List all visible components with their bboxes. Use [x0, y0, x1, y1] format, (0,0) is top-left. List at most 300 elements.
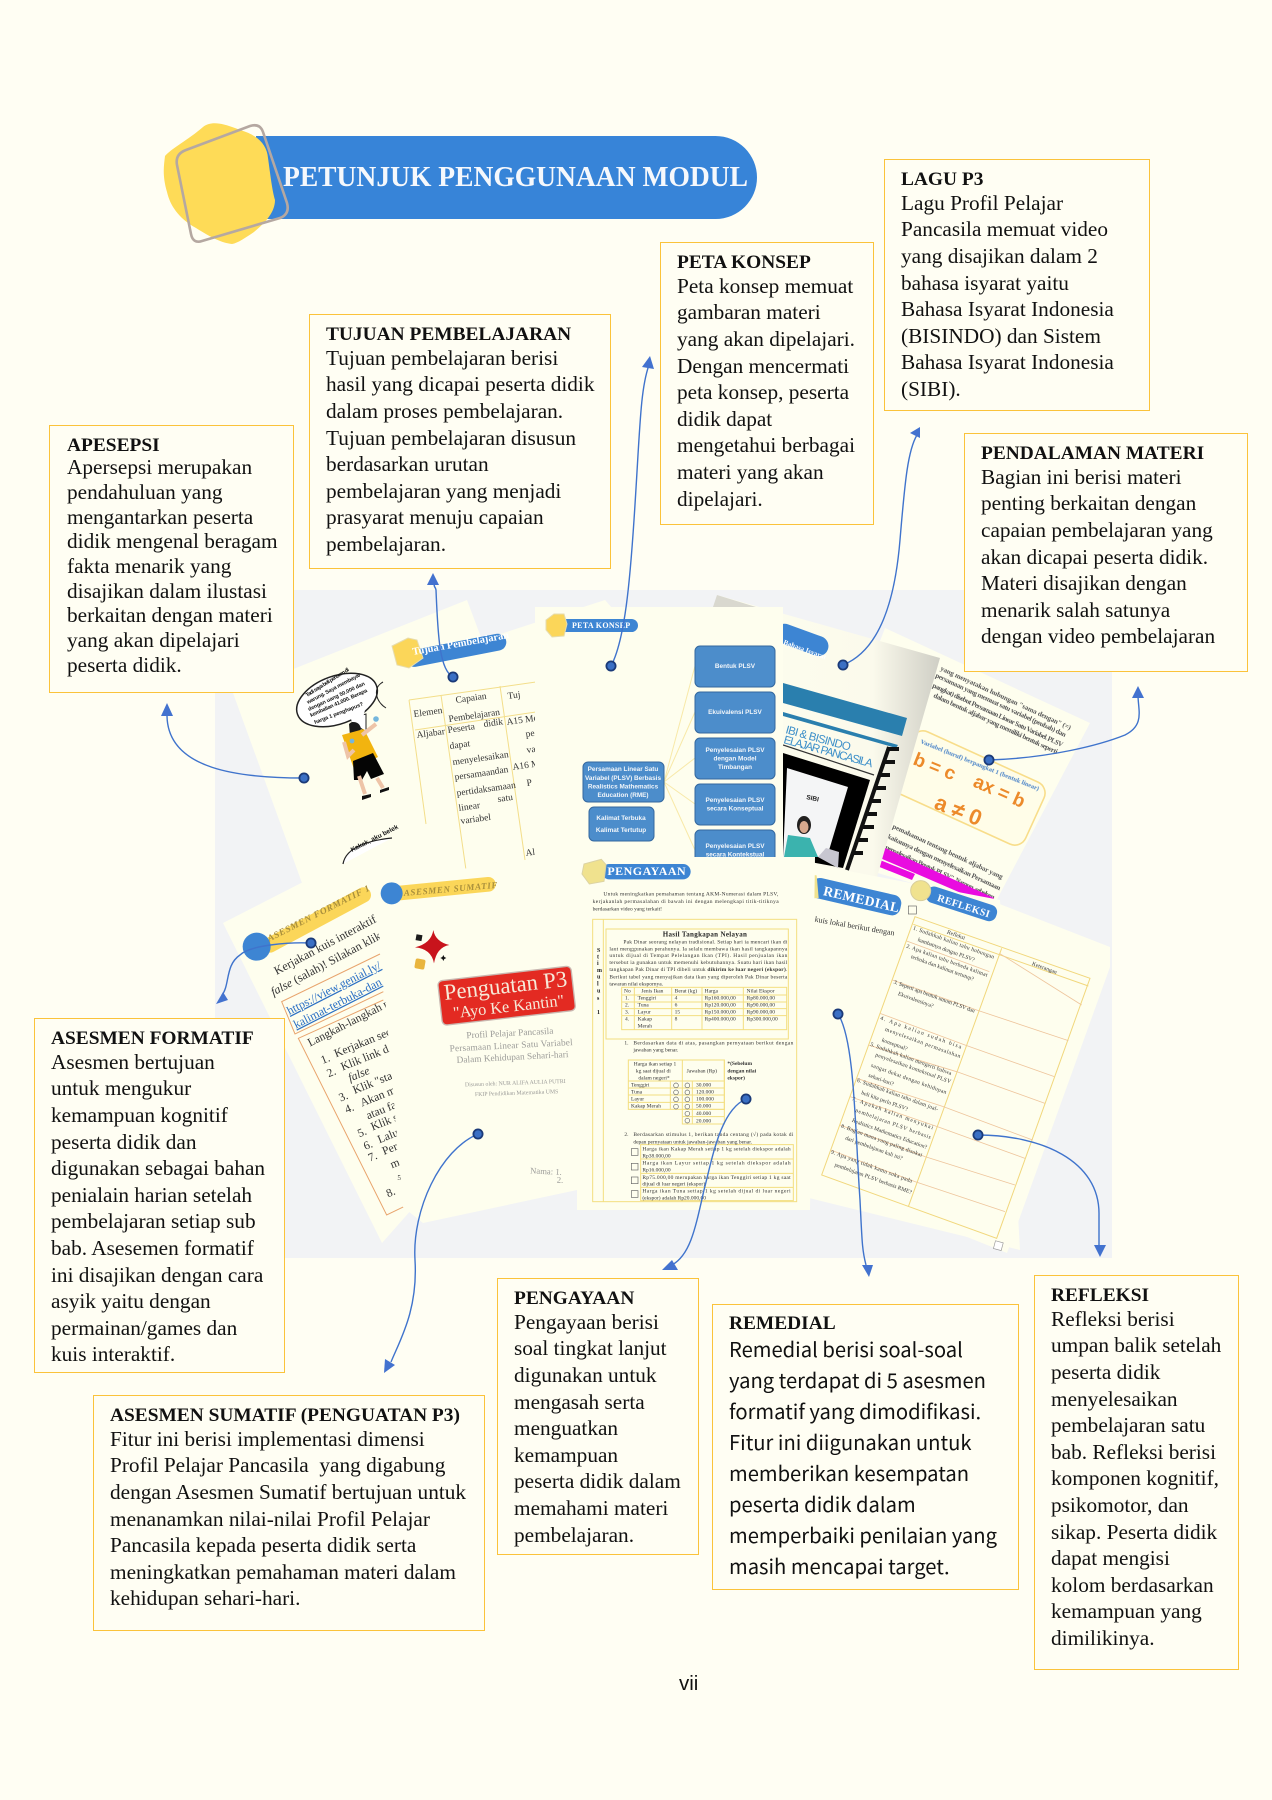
page: pendalaman materi: kaitannya dengan menyelesaikan Persamaan: [886, 833, 1002, 892]
panel: lagu p3: [884, 159, 1150, 411]
tujuan pembelajaran table: A16 M: [512, 759, 541, 773]
page: pengayaan: Rp16.000,00: [642, 1167, 671, 1173]
panel: apesepsi: [49, 425, 294, 693]
panel: pengayaan: pembelajaran.: [514, 1523, 634, 1547]
page: pengayaan: Harga ikan Kakap Merah setiap 1 kg setelah diekspor adalah: [642, 1147, 791, 1153]
panel: asesmen sumatif: Pancasila kepada peserta didik serta: [110, 1533, 416, 1557]
page: asesmen sumatif: Profil Pelajar Pancasila: [466, 1026, 554, 1041]
panel: apesepsi: berkaitan dengan materi: [67, 603, 273, 627]
panel: asesmen formatif: kemampuan kognitif: [51, 1103, 228, 1127]
panel: apesepsi: mengantarkan peserta: [67, 505, 253, 529]
panel: apesepsi: yang akan dipelajari: [67, 628, 240, 652]
page: asesmen formatif: Kerjakan sec: [332, 1025, 393, 1060]
page: pengayaan: Rp75.000,00 merupakan harga ikan Tenggiri setiap 1 kg saat: [642, 1175, 791, 1181]
page: refleksi: hambatnya dengan PLSV?: [917, 937, 976, 964]
panel: pengayaan: Pengayaan berisi: [514, 1310, 659, 1334]
panel: lagu p3: yang disajikan dalam 2: [901, 244, 1098, 268]
page: peta konsep: secara Kontekstual: [706, 852, 765, 858]
page: refleksi: Keterangan: [1031, 961, 1058, 976]
page: pengayaan: 4.: [625, 1017, 630, 1023]
page: asesmen formatif: Kerjakan kuis interaktif: [272, 912, 379, 978]
page: pengayaan: 1.: [625, 996, 630, 1002]
panel: refleksi: sikap. Peserta didik: [1051, 1520, 1217, 1544]
tujuan pembelajaran header: [392, 630, 510, 668]
page: pengayaan: dijual di luar negeri (ekspor): [642, 1181, 705, 1188]
page: refleksi: [822, 881, 1110, 1253]
page: pengayaan: 2.: [624, 1132, 629, 1138]
page: peta konsep: secara Konseptual: [707, 806, 764, 812]
panel: lagu p3: (BISINDO) dan Sistem: [901, 324, 1101, 348]
page: refleksi: sangat dekat dengan kehidupan: [870, 1063, 947, 1096]
panel: asesmen formatif: ASESMEN FORMATIF: [51, 1028, 254, 1049]
page: peta konsep: PETA KONSEP: [572, 621, 630, 630]
page: pengayaan: 1: [597, 1010, 600, 1016]
page: pengayaan: Pak Dinar seorang nelayan tradisional. Setiap hari ia mencari ikan di: [623, 939, 788, 945]
page: pengayaan: S: [597, 948, 601, 954]
panel: asesmen sumatif: [93, 1395, 485, 1631]
page: asesmen formatif: kalimat-terbuka-dan: [291, 975, 384, 1031]
tujuan pembelajaran table: A15 Me: [506, 714, 539, 728]
page: refleksi: pembelajaran PLSV berbasis: [854, 1108, 932, 1141]
page: asesmen formatif: atau fa: [364, 1098, 399, 1122]
panel: refleksi: REFLEKSI: [1051, 1285, 1149, 1306]
panel: tujuan pembelajaran: prasyarat menuju capaian: [326, 505, 544, 529]
panel: refleksi: peserta didik: [1051, 1360, 1160, 1384]
page: pendalaman materi: yang menyatakan hubungan "sama dengan" (=): [939, 665, 1073, 732]
page: pendalaman materi: Variabel (huruf) berpangkat 1 (bentuk linear): [919, 738, 1040, 793]
page: asesmen formatif: 8.: [384, 1185, 397, 1200]
page: peta konsep: Penyelesaian PLSV: [706, 843, 765, 850]
panel: refleksi: komponen kognitif,: [1051, 1466, 1219, 1490]
page: asesmen formatif: 5.: [356, 1125, 369, 1140]
page: asesmen formatif: false (salah)! Silakan klik: [268, 929, 383, 999]
page: pengayaan: Hasil Tangkapan Nelayan: [663, 931, 747, 939]
panel: pengayaan: [497, 1278, 699, 1555]
page: asesmen formatif: 4.: [343, 1101, 356, 1116]
panel: pengayaan: peserta didik dalam: [514, 1469, 681, 1493]
tujuan pembelajaran table: Capaian: [455, 692, 487, 706]
tujuan pembelajaran table: P: [526, 778, 533, 789]
panel: pendalaman materi: capaian pembelajaran yang: [981, 518, 1213, 542]
page: refleksi: 8. Bagian mana yang paling disukai: [840, 1124, 923, 1159]
panel: asesmen sumatif: meningkatkan pemahaman materi dalam: [110, 1560, 456, 1584]
panel: apesepsi: APESEPSI: [67, 435, 160, 456]
page: asesmen formatif: false: [346, 1064, 372, 1084]
tujuan pembelajaran table: pe: [525, 729, 535, 740]
page: pengayaan: Tuna: [631, 1090, 643, 1096]
panel: pengayaan: memahami materi: [514, 1496, 668, 1520]
page: refleksi: 7. Apakah kalian menyukai: [851, 1096, 934, 1131]
tujuan pembelajaran table: [409, 682, 541, 870]
panel: refleksi: menyelesaikan: [1051, 1387, 1178, 1411]
panel: refleksi: kemampuan yang: [1051, 1599, 1202, 1623]
page: pengayaan: Layur: [638, 1010, 651, 1016]
page: pengayaan: u: [597, 975, 601, 981]
page: peta konsep: Persamaan Linear Satu: [588, 766, 658, 773]
panel: tujuan pembelajaran: Tujuan pembelajaran disusun: [326, 426, 576, 450]
page: asesmen sumatif: Persamaan Linear Satu Variabel: [449, 1038, 573, 1055]
panel: pengayaan: soal tingkat lanjut: [514, 1336, 667, 1360]
tujuan pembelajaran table: menyelesaikan: [452, 750, 510, 768]
page: asesmen formatif: [223, 860, 420, 1243]
page: asesmen formatif: ASESMEN FORMATIF 1: [265, 884, 372, 945]
tujuan pembelajaran table: Peserta: [447, 722, 476, 736]
page: pengayaan: 30.000: [696, 1083, 711, 1089]
page: pengayaan: Kakap: [638, 1017, 652, 1023]
tujuan pembelajaran table: va: [526, 745, 537, 756]
panel: remedial: Fitur ini diigunakan untuk: [729, 1426, 972, 1456]
panel: refleksi: pembelajaran satu: [1051, 1413, 1205, 1437]
tujuan pembelajaran table: dan: [494, 765, 509, 777]
panel: pengayaan: menguatkan: [514, 1416, 618, 1440]
page: peta konsep: Ekuivalensi PLSV: [708, 709, 763, 716]
page: pengayaan: Berikut tabel yang menyajikan data ikan yang diperoleh Pak Dinar beserta: [609, 974, 788, 980]
page: pengayaan: PENGAYAAN: [607, 864, 686, 878]
page: pengayaan: i: [597, 961, 599, 967]
panel: remedial: [712, 1304, 1019, 1590]
page: pengayaan: tangkapan Pak Dinar di TPI dibeli untuk dikirim ke luar negeri (ekspor).: [609, 966, 788, 973]
panel: remedial: masih mencapai target.: [729, 1550, 950, 1580]
panel: tujuan pembelajaran: berdasarkan urutan: [326, 452, 489, 476]
page: pendalaman materi: [800, 628, 1090, 907]
tujuan pembelajaran table: satu: [497, 793, 514, 805]
panel: lagu p3: Lagu Profil Pelajar: [901, 191, 1063, 215]
panel: asesmen formatif: bab. Asesemen formatif: [51, 1236, 254, 1260]
panel: apesepsi: Apersepsi merupakan: [67, 455, 252, 479]
page: pendalaman materi: pangkat) disebut Persamaan Linear Satu Variabel. PLSV: [931, 682, 1064, 749]
panel: refleksi: umpan balik setelah: [1051, 1333, 1221, 1357]
icon: yellow blob: [164, 123, 275, 244]
page: asesmen sumatif: "Ayo Ke Kantin": [452, 991, 565, 1022]
panel: peta konsep: yang akan dipelajari.: [677, 327, 855, 351]
page: peta konsep: Bentuk PLSV: [715, 663, 756, 670]
panel: asesmen formatif: penialain harian setelah: [51, 1183, 252, 1207]
page: refleksi: 5. Sudahkah kalian mengerti bahwa: [869, 1042, 953, 1077]
page: pengayaan: Rp150.000,00: [705, 1010, 736, 1016]
panel: apesepsi: didik mengenal beragam: [67, 529, 278, 553]
panel: peta konsep: PETA KONSEP: [677, 252, 811, 273]
page: pengayaan: laut menggunakan perahunya. Ia selalu membawa ikan hasil tangkapannya: [609, 947, 788, 953]
page: refleksi: 9. Apa yang tidak kamu suka pada: [830, 1150, 913, 1185]
page: pendalaman materi: persamaan yang memuat satu variabel (peubah) dan: [934, 672, 1067, 739]
page: pengayaan: u: [597, 989, 601, 995]
panel: pendalaman materi: dengan video pembelajaran: [981, 624, 1215, 648]
panel: pengayaan: PENGAYAAN: [514, 1288, 634, 1309]
panel: apesepsi: peserta didik.: [67, 653, 182, 677]
title text: PETUNJUK PENGGUNAAN MODUL: [283, 162, 748, 193]
icon: outline square: [177, 125, 288, 242]
page: pengayaan: Harga: [705, 989, 719, 995]
page: pengayaan: kerjakanlah permasalahan di bawah ini dengan melengkapi titik-titiknya: [593, 899, 779, 905]
page: peta konsep: Kalimat Terbuka: [596, 815, 646, 822]
page: pengayaan: Jenis Ikan: [641, 989, 664, 995]
page: pengayaan: Rp90.000,00: [747, 1010, 775, 1016]
page: asesmen formatif: 1.: [319, 1051, 332, 1067]
panel: refleksi: psikomotor, dan: [1051, 1493, 1189, 1517]
panel: remedial: Remedial berisi soal-soal: [729, 1334, 963, 1362]
page: pengayaan: kg saat dijual di: [636, 1069, 671, 1075]
panel: peta konsep: dipelajari.: [677, 487, 763, 511]
page: pengayaan: m: [597, 968, 602, 974]
panel: asesmen sumatif: menanamkan nilai-nilai Profil Pelajar: [110, 1507, 430, 1531]
page: pengayaan: jawaban yang benar.: [632, 1048, 679, 1054]
page: pengayaan: 1.: [624, 1040, 629, 1046]
tujuan pembelajaran table: Elemen: [413, 706, 443, 720]
page: pengayaan: Rp120.000,00: [705, 1003, 736, 1009]
page: refleksi: Refleksi: [946, 929, 966, 942]
panel: refleksi: Refleksi berisi: [1051, 1307, 1175, 1331]
page: pengayaan: 3.: [625, 1010, 630, 1016]
panel: asesmen formatif: permainan/games dan: [51, 1316, 237, 1340]
page: asesmen formatif: Per: [380, 1140, 400, 1158]
page: refleksi: konseptual?: [881, 1038, 909, 1053]
panel: asesmen formatif: digunakan sebagai bahan: [51, 1156, 265, 1180]
page: remedial: [790, 860, 1020, 1250]
panel: lagu p3: LAGU P3: [901, 169, 983, 190]
page: pendalaman materi: a ≠ 0: [931, 789, 986, 831]
panel: pengayaan: mengasah serta: [514, 1390, 645, 1414]
page: asesmen sumatif: 2.: [557, 1175, 564, 1185]
tujuan pembelajaran table: dapat: [449, 739, 471, 752]
page: asesmen formatif: Langkah-langkah p: [305, 997, 392, 1049]
page: refleksi: menyelesaikan permasalahan: [884, 1027, 961, 1060]
panel: tujuan pembelajaran: hasil yang dicapai peserta didik: [326, 372, 594, 396]
page: lagu P3 video: [700, 595, 940, 877]
page: pendalaman materi: menyelesaikan Bentuk PLSV". Namun, sebelum: [882, 843, 996, 901]
page: asesmen formatif: Klik "sta: [351, 1069, 395, 1097]
page: pengayaan: Kakap Merah: [631, 1104, 661, 1110]
page: peta konsep: [535, 607, 783, 871]
page: lagu P3 video: ELAJAR PANCASILA: [782, 734, 874, 770]
panel: refleksi: [1034, 1275, 1239, 1670]
panel: peta konsep: mengetahui berbagai: [677, 433, 855, 457]
tujuan pembelajaran table: persamaan: [454, 767, 496, 783]
panel: remedial: memberikan kesempatan: [729, 1458, 969, 1486]
page: pengayaan: Rp90.000,00: [747, 1003, 775, 1009]
page: asesmen formatif: 6.: [362, 1137, 375, 1153]
page: lagu P3 video: Bahasa Isyarat: [782, 638, 828, 661]
page: pengayaan: Nilai Ekspor: [747, 989, 775, 995]
panel: peta konsep: gambaran materi: [677, 300, 821, 324]
illustration: apersepsi student: kembalian 41.000. Berapa: [309, 688, 369, 719]
page: remedial: s kuis lokal berikut dengan: [809, 914, 895, 938]
panel: pengayaan: digunakan untuk: [514, 1363, 657, 1387]
page: pengayaan: Harga ikan setiap 1: [634, 1062, 676, 1068]
page: asesmen formatif: Klik link d: [339, 1042, 391, 1073]
page: pengayaan: [577, 857, 815, 1210]
panel: remedial: memperbaiki penilaian yang: [729, 1520, 997, 1548]
page: asesmen sumatif: Dalam Kehidupan Sehari-hari: [456, 1050, 569, 1066]
page: pengayaan: Berdasarkan data di atas, pasangkan pernyataan berikut dengan: [633, 1040, 794, 1046]
panel: lagu p3: Bahasa Isyarat Indonesia: [901, 350, 1114, 374]
panel: tujuan pembelajaran: pembelajaran yang menjadi: [326, 479, 561, 503]
panel: lagu p3: Bahasa Isyarat Indonesia: [901, 297, 1114, 321]
page: asesmen sumatif: FKIP Pendidikan Matematika UMS: [475, 1089, 558, 1098]
page: pengayaan: No: [624, 989, 631, 995]
page: pengayaan: untuk dijual di Tempat Pelelangan Ikan (TPI). Hasil penjualan ikan: [609, 952, 788, 959]
panel: lagu p3: bahasa isyarat yaitu: [901, 271, 1069, 295]
panel: apesepsi: fakta menarik yang: [67, 554, 231, 578]
page: pengayaan: t: [597, 955, 599, 961]
page: pengayaan: Jawaban (Rp): [687, 1068, 717, 1075]
page: asesmen sumatif: ASESMEN SUMATIF: [402, 880, 498, 898]
panel: pendalaman materi: PENDALAMAN MATERI: [981, 443, 1204, 464]
page: pengayaan: 15: [675, 1010, 680, 1016]
page: asesmen formatif: 5: [397, 1173, 401, 1182]
illustration: apersepsi student: [289, 663, 400, 864]
page: refleksi: 6. Sudahkah kalian tahu dalam jual-: [856, 1078, 939, 1113]
page: peta konsep: Education (RME): [597, 792, 649, 799]
panel: peta konsep: Dengan mencermati: [677, 354, 849, 378]
page: refleksi: Ekuivalensinya?: [897, 991, 935, 1010]
page: pengayaan: Harga ikan Tuna setiap 1 kg setelah dijual di luar negeri: [642, 1189, 791, 1195]
panel: asesmen formatif: Asesmen bertujuan: [51, 1050, 215, 1074]
page: pengayaan: Tuna: [638, 1003, 649, 1009]
page: refleksi: REFLEKSI: [936, 893, 991, 920]
panel: asesmen sumatif: dengan Asesmen Sumatif bertujuan untuk: [110, 1480, 466, 1504]
page: pengayaan: *(Sebelum: [727, 1060, 752, 1067]
page: pengayaan: 50.000: [696, 1104, 711, 1110]
panel: pendalaman materi: Materi disajikan dengan: [981, 571, 1187, 595]
page: pengayaan: Rp300.000,00: [747, 1017, 778, 1023]
page: peta konsep: Penyelesaian PLSV: [706, 747, 765, 754]
page: pengayaan: ekspor): [727, 1075, 745, 1082]
page: pengayaan: tersebut ia gunakan untuk memenuhi kebutuhannya. Suatu hari ikan hasil: [609, 960, 788, 966]
panel: tujuan pembelajaran: [309, 314, 611, 569]
page: refleksi: sehari-hari?: [867, 1073, 895, 1088]
page: pengayaan: Layur: [631, 1097, 644, 1103]
collage of module pages: [215, 590, 1112, 1258]
page: refleksi: 1. Sudahkah kalian tahu hubungan: [912, 926, 995, 961]
tujuan pembelajaran header: Tujuan Pembelajaran: [412, 630, 510, 658]
page: asesmen formatif: https://view.genial.ly/: [284, 958, 384, 1018]
page: refleksi: 3. Seperti apa bentuk umum PLSV dan: [893, 980, 976, 1015]
illustration: apersepsi student: Tadi saya beli pensem di: [305, 667, 351, 699]
panel: pendalaman materi: akan dicapai peserta didik.: [981, 545, 1208, 569]
panel: asesmen formatif: ini disajikan dengan cara: [51, 1263, 263, 1287]
page: asesmen formatif: 2.: [325, 1065, 338, 1080]
page: asesmen formatif: Akan m: [358, 1083, 398, 1109]
page: peta konsep: Timbangan: [718, 764, 752, 771]
panel: lagu p3: Pancasila memuat video: [901, 217, 1108, 241]
page: pengayaan: 20.000: [696, 1118, 711, 1124]
panel: peta konsep: [660, 242, 874, 525]
page: pengayaan: 100.000: [696, 1097, 714, 1103]
panel: tujuan pembelajaran: dalam proses pembelajaran.: [326, 399, 563, 423]
page: pengayaan: Tenggiri: [631, 1083, 650, 1089]
page: pengayaan: 2.: [625, 1003, 630, 1009]
page: refleksi: beli kita perlu PLSV?: [860, 1090, 909, 1113]
panel: asesmen formatif: kuis interaktif.: [51, 1342, 175, 1366]
tujuan pembelajaran table: variabel: [460, 813, 492, 827]
illustration: apersepsi student: warung. Saya membayar: [305, 672, 363, 706]
page: asesmen formatif: Klik s: [369, 1111, 400, 1133]
page: asesmen formatif: Lalu: [376, 1126, 400, 1146]
page: pengayaan: tawaran nilai ekspornya.: [609, 981, 664, 987]
page: peta konsep: Penyelesaian PLSV: [706, 797, 765, 804]
panel: asesmen sumatif: ASESMEN SUMATIF (PENGUATAN P3): [110, 1405, 460, 1426]
panel: apesepsi: pendahuluan yang: [67, 480, 223, 504]
panel: asesmen formatif: asyik yaitu dengan: [51, 1289, 211, 1313]
page: pengayaan: Berdasarkan stimulus 1, berikan tanda centang (√) pada kotak di: [633, 1131, 794, 1138]
page: pengayaan: 8: [675, 1017, 678, 1023]
page: refleksi: Realistics Mathematics Education?: [851, 1118, 928, 1151]
page number: vii: [679, 1672, 698, 1695]
tujuan pembelajaran table: Al: [525, 848, 536, 859]
page: pendalaman materi: dalam bentuk aljabar yang memiliki bentuk seperti: [932, 692, 1059, 756]
panel: peta konsep: peta konsep, peserta: [677, 380, 849, 404]
tujuan pembelajaran table: pertidaksamaan: [456, 781, 517, 799]
page: lagu P3 video: IBI & BISINDO: [784, 724, 852, 754]
panel: tujuan pembelajaran: TUJUAN PEMBELAJARAN: [326, 324, 571, 345]
page: refleksi: 4. Apa kalian sudah bisa: [879, 1016, 963, 1051]
page: refleksi: dari pembelajaran kali ini?: [844, 1136, 904, 1162]
panel: peta konsep: didik dapat: [677, 407, 772, 431]
page: peta konsep: Realistics Mathematics: [588, 784, 659, 790]
page: asesmen apersepsi and tujuan pembelajaran: [233, 600, 640, 890]
panel: apesepsi: disajikan dalam ilustasi: [67, 579, 267, 603]
page: remedial: REMEDIAL: [822, 883, 901, 915]
panel: remedial: peserta didik dalam: [729, 1488, 916, 1518]
page: pengayaan: 40.000: [696, 1111, 711, 1117]
illustration: apersepsi student: harga 1 penghapus?: [314, 702, 364, 726]
tujuan pembelajaran table: Pembelajaran: [448, 708, 501, 725]
panel: refleksi: dapat mengisi: [1051, 1546, 1170, 1570]
page: pengayaan: Merah: [638, 1024, 652, 1030]
page: pengayaan: 6: [675, 1003, 678, 1009]
page: asesmen sumatif: Disusun oleh: NUR ALIFA AULIA PUTRI: [465, 1079, 566, 1088]
page: pengayaan: Harga ikan Layur setiap 1 kg setelah diekspor adalah: [642, 1161, 791, 1167]
tujuan pembelajaran table: didik: [483, 717, 504, 730]
panel: refleksi: kolom berdasarkan: [1051, 1573, 1214, 1597]
page: pengayaan: Berat (kg): [675, 988, 697, 995]
panel: asesmen sumatif: Fitur ini berisi implementasi dimensi: [110, 1427, 425, 1451]
page: refleksi: pembelajaran PLSV berbasis RME?: [834, 1162, 913, 1196]
panel: tujuan pembelajaran: pembelajaran.: [326, 532, 446, 556]
page: pengayaan: berdasarkan video yang terkait!: [593, 906, 662, 912]
page: pengayaan: depan pernyataan untuk jawaban-jawaban yang benar.: [633, 1139, 753, 1145]
panel: tujuan pembelajaran: Tujuan pembelajaran berisi: [326, 346, 558, 370]
tujuan pembelajaran table: Tuj: [507, 690, 521, 702]
page: pengayaan: Rp80.000,00: [747, 996, 775, 1002]
panel: remedial: formatif yang dimodifikasi.: [729, 1396, 981, 1424]
illustration: apersepsi student: Kakak, aku belek: [350, 824, 400, 854]
page: pendalaman materi: b = c: [910, 749, 959, 785]
panel: pendalaman materi: [964, 433, 1248, 672]
panel: refleksi: bab. Refleksi berisi: [1051, 1440, 1216, 1464]
panel: pendalaman materi: Bagian ini berisi materi: [981, 465, 1182, 489]
panel: asesmen sumatif: Profil Pelajar Pancasila yang digabung: [110, 1453, 445, 1477]
panel: lagu p3: (SIBI).: [901, 377, 961, 401]
panel: asesmen formatif: [34, 1018, 285, 1373]
page: pengayaan: l: [597, 981, 599, 987]
page: peta konsep: dengan Model: [714, 756, 757, 762]
page: pengayaan: Rp38.000,00: [642, 1153, 671, 1159]
page: pengayaan: dalam negeri*: [638, 1075, 670, 1081]
panel: pengayaan: kemampuan: [514, 1443, 618, 1467]
panel: pendalaman materi: penting berkaitan dengan: [981, 491, 1196, 515]
panel: refleksi: dimilikinya.: [1051, 1626, 1155, 1650]
page: pendalaman materi: ax = b: [970, 771, 1028, 813]
title banner: [164, 123, 757, 244]
page: asesmen sumatif: Nama: 1.: [530, 1165, 562, 1177]
page: pengayaan: dengan nilai: [727, 1068, 757, 1074]
page: pengayaan: Untuk meningkatkan pemahaman tentang AKM-Numerasi dalam PLSV,: [603, 891, 779, 897]
page: pengayaan: s: [597, 996, 600, 1002]
page: lagu P3 video: SIBI: [806, 794, 820, 804]
page: asesmen sumatif: [375, 850, 600, 1223]
page: peta konsep: Variabel (PLSV) Berbasis: [585, 775, 661, 782]
